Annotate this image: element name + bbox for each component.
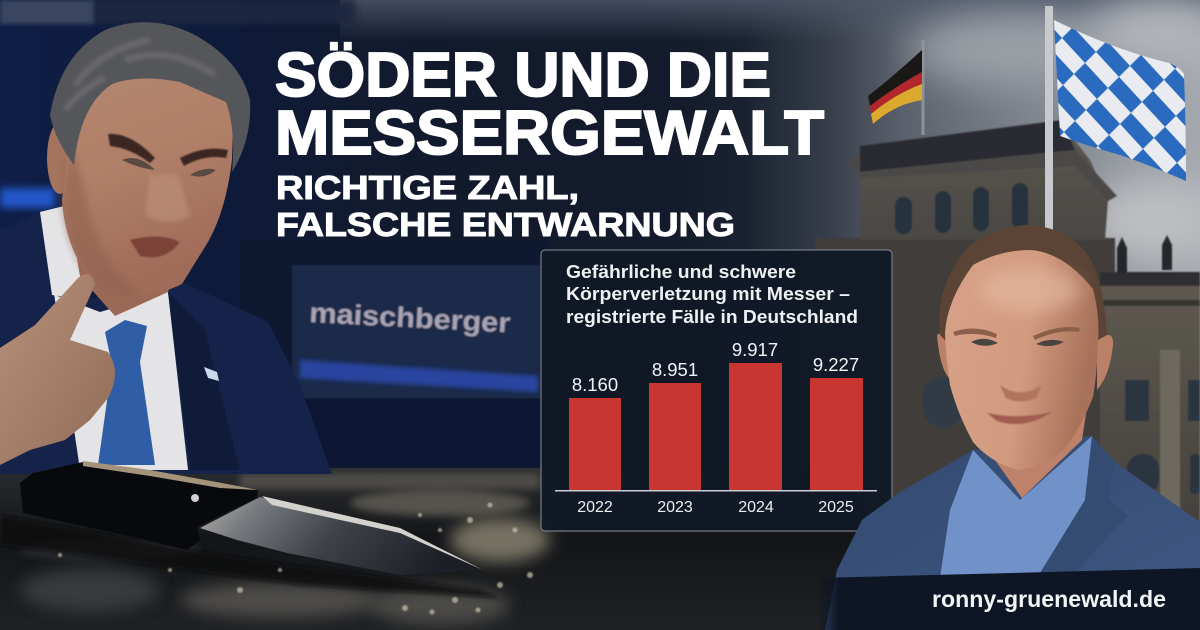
bars — [569, 363, 863, 490]
main title: MESSERGEWALT — [275, 99, 824, 168]
chart title: Gefährliche und schwere — [566, 262, 796, 282]
face — [945, 250, 1098, 470]
Bavarian flag — [1045, 6, 1186, 230]
studio sign: maischberger — [292, 265, 540, 470]
table surface — [0, 468, 870, 630]
year labels — [577, 499, 854, 516]
shirt — [940, 436, 1092, 578]
jacket — [825, 436, 1200, 630]
mouth — [130, 236, 180, 257]
main title: SÖDER UND DIE — [275, 41, 771, 110]
year labels: 2023 — [657, 499, 693, 516]
left person: politician — [0, 22, 332, 474]
smile — [987, 412, 1052, 424]
right person: author — [825, 225, 1200, 630]
hair crown — [939, 225, 1107, 340]
German flag — [868, 40, 924, 135]
hand pointing — [0, 274, 115, 465]
shirt — [42, 212, 188, 470]
nose — [145, 175, 190, 222]
neck — [66, 210, 190, 316]
lapel right — [1037, 436, 1128, 578]
left collar — [40, 205, 84, 300]
value labels: 8.951 — [652, 359, 698, 380]
value labels: 9.917 — [732, 339, 778, 360]
main title — [275, 41, 824, 168]
eyes — [122, 158, 216, 177]
knife — [20, 461, 483, 575]
year labels: 2024 — [738, 499, 774, 516]
value labels: 8.160 — [572, 374, 618, 395]
hair highlights — [65, 40, 215, 110]
chart title: registrierte Fälle in Deutschland — [566, 307, 858, 327]
face — [62, 70, 234, 295]
tower — [860, 122, 1108, 240]
value labels: 9.227 — [813, 354, 859, 375]
right wing — [1100, 282, 1200, 578]
bottom band — [820, 568, 1200, 630]
Reichstag building — [815, 120, 1200, 578]
forehead highlight — [980, 268, 1080, 312]
subtitle — [276, 169, 735, 243]
nose — [1000, 385, 1042, 402]
lower body — [815, 238, 1115, 578]
ears — [937, 333, 1113, 390]
suit — [0, 210, 332, 474]
lapel shadow — [168, 292, 240, 470]
axis — [555, 490, 877, 492]
chart title: Körperverletzung mit Messer – — [566, 284, 850, 304]
tie — [98, 320, 155, 465]
year labels: 2025 — [818, 499, 854, 516]
neck — [975, 400, 1088, 498]
value labels — [572, 339, 859, 395]
ear — [47, 122, 73, 194]
subtitle: FALSCHE ENTWARNUNG — [276, 206, 735, 243]
tower windows — [895, 197, 912, 234]
statues — [1117, 235, 1172, 273]
subtitle: RICHTIGE ZAHL, — [276, 169, 579, 206]
chart panel — [541, 250, 892, 531]
hair — [50, 22, 250, 172]
face shading — [62, 140, 140, 296]
website url: ronny-gruenewald.de — [932, 586, 1166, 612]
brows — [108, 134, 228, 166]
brows — [953, 327, 1080, 340]
eyes — [971, 339, 1064, 346]
lapel pin — [204, 367, 219, 381]
lower windows — [923, 377, 963, 427]
chart title — [566, 262, 858, 327]
studio sign: maischberger: maischberger — [309, 297, 511, 339]
year labels: 2022 — [577, 499, 613, 516]
reflections — [58, 502, 533, 614]
